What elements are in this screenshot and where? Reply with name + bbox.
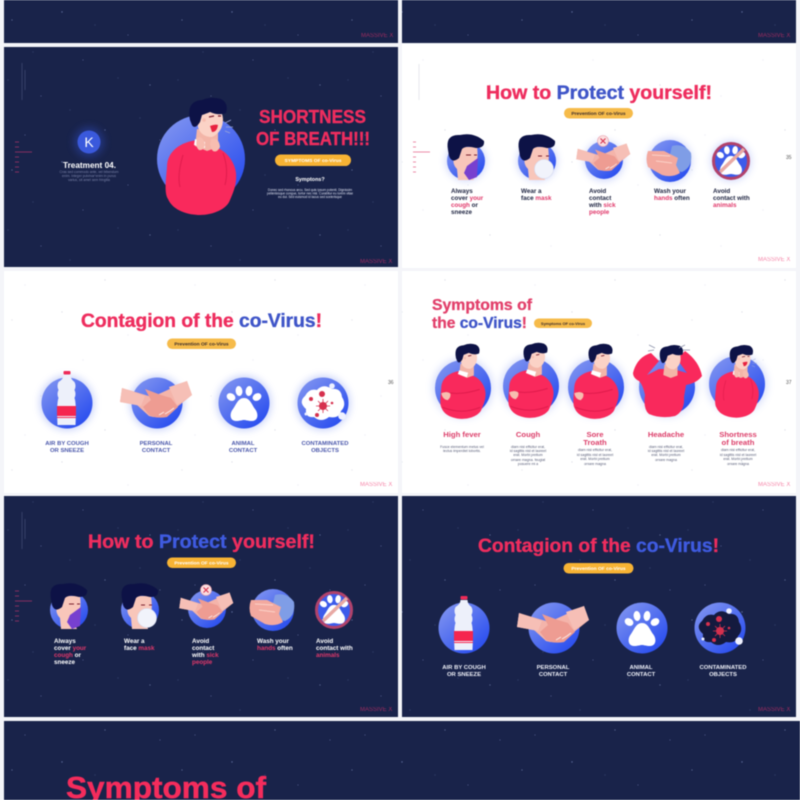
icon: K logo badge	[74, 127, 104, 157]
tip labels: sneeze	[54, 659, 76, 666]
route labels: PERSONAL	[537, 665, 570, 671]
pill: prevention	[564, 563, 634, 574]
tip labels	[451, 188, 750, 216]
icon glows	[40, 376, 350, 430]
heading: shortness of breath	[256, 107, 370, 149]
route labels	[442, 665, 746, 678]
page number: 36	[388, 380, 394, 386]
route labels: CONTAMINATED	[700, 665, 746, 671]
icon: handshake	[120, 378, 192, 428]
symptom labels: Headache	[648, 430, 685, 439]
symptom descriptions: id sagittis nisl et laoreet	[648, 449, 684, 453]
panel: top left dark slide	[4, 0, 398, 43]
panel: contagion (light)	[4, 271, 398, 493]
symptoms text block: Symptons?	[295, 177, 325, 183]
tip labels: hands often	[654, 195, 690, 202]
symptoms text block	[267, 177, 353, 199]
tip labels: face mask	[124, 645, 155, 652]
panel: top right dark slide	[402, 0, 796, 43]
panel: symptoms (dark, cropped)	[4, 721, 800, 800]
route labels: CONTAMINATED	[302, 441, 348, 447]
route labels: CONTACT	[142, 448, 171, 454]
icon: wash hands	[646, 140, 691, 182]
tip labels: cough or	[54, 652, 81, 659]
brand mark: MASSIVE X	[360, 707, 392, 713]
symptom descriptions: ornare magna	[584, 462, 606, 466]
symptom descriptions: id sagittis nisl et laoreet	[510, 449, 546, 453]
tip labels: with sick	[588, 202, 616, 209]
brand mark: MASSIVE X	[360, 482, 392, 488]
tip labels: Avoid	[316, 638, 333, 645]
heading: How to Protect yourself!	[88, 532, 315, 553]
heading: Contagion of the co-Virus!	[478, 536, 719, 557]
route labels: PERSONAL	[140, 441, 173, 447]
tip labels: animals	[713, 202, 737, 209]
symptom descriptions: id sagittis nisl et laoreet	[577, 453, 613, 457]
symptom descriptions: erat. Morbi pretium	[651, 453, 681, 457]
tip labels: cough or	[451, 202, 478, 209]
tip labels: sneeze	[451, 209, 473, 216]
illustration: man short of breath	[157, 98, 245, 215]
route labels: CONTACT	[229, 448, 258, 454]
pill: prevention: Prevention OF co-Virus	[571, 566, 626, 572]
brand mark: MASSIVE X	[758, 482, 790, 488]
icon: bottle	[438, 596, 490, 654]
symptom descriptions: erat. Morbi pretium	[723, 457, 753, 461]
symptom labels: Sore	[586, 430, 604, 439]
tip labels: cover your	[54, 645, 87, 652]
brand mark: MASSIVE X	[758, 33, 790, 39]
figure: shortness of breath	[709, 345, 765, 418]
tip labels: Avoid	[713, 188, 730, 195]
tip labels: people	[192, 659, 213, 666]
icon: wash hands	[250, 589, 294, 631]
panel: how to protect yourself (dark)	[4, 496, 398, 717]
symptoms text block: Donec sed rhoncus arcu. Sed quis ipsum potenti. Dignissim	[268, 188, 352, 192]
treatment heading: Treatment 04.	[63, 161, 116, 170]
brand mark: MASSIVE X	[758, 257, 790, 263]
figure: high fever	[435, 344, 491, 419]
symptom descriptions: erat. Morbi pretium	[580, 457, 610, 461]
icon: face mask	[121, 583, 159, 629]
symptom labels: Cough	[516, 430, 540, 439]
icon: cover cough	[447, 134, 485, 180]
pill: prevention	[167, 558, 236, 568]
tip labels: Wear a	[124, 638, 145, 645]
icon: avoid animals	[714, 144, 748, 178]
route labels: OR SNEEZE	[447, 672, 481, 678]
tip labels: contact with	[316, 645, 353, 652]
tip labels: animals	[316, 652, 340, 659]
pill: symptoms label: SYMPTOMS OF co-Virus	[285, 158, 342, 164]
tip labels: Wash your	[654, 188, 687, 195]
tip labels: Wear a	[521, 188, 542, 195]
figure: sore throat	[568, 344, 624, 419]
route labels	[45, 441, 348, 454]
symptom descriptions: Fusce elementum metus vel	[440, 445, 484, 449]
heading: How to Protect yourself!	[486, 83, 712, 104]
brand mark: MASSIVE X	[360, 259, 392, 265]
icon: paw	[616, 602, 668, 654]
icon: avoid handshake	[179, 584, 233, 628]
symptom labels: Shortness	[719, 430, 757, 439]
symptom labels: of breath	[722, 438, 755, 447]
tip labels: Always	[451, 188, 473, 195]
treatment description: Cras sed commodo ante, vel bibendum	[60, 170, 119, 174]
panel: shortness of breath slide	[4, 47, 398, 267]
panel: how to protect yourself (light)	[402, 44, 796, 268]
icon: avoid handshake	[576, 136, 630, 179]
tip labels: with sick	[191, 652, 219, 659]
panel: contagion (dark)	[402, 496, 796, 717]
icon: paw	[218, 378, 270, 428]
tip labels: hands often	[257, 645, 293, 652]
icon: avoid animals	[316, 592, 352, 628]
symptom descriptions: ornare magna	[727, 462, 749, 466]
icon: contaminated cloud	[694, 602, 746, 654]
symptom descriptions	[440, 445, 756, 466]
tip labels: face mask	[521, 195, 552, 202]
pill: symptoms: Symptoms OF co-Virus	[541, 321, 586, 326]
symptom descriptions: ornare magna. feugiat	[511, 458, 545, 462]
page number: 35	[786, 155, 792, 161]
symptom descriptions: ornare magna	[655, 458, 677, 462]
icon glows	[446, 139, 751, 183]
route labels: OBJECTS	[311, 448, 339, 454]
symptom descriptions: diam nisi efficitur erat,	[578, 448, 612, 452]
route labels: AIR BY COUGH	[45, 441, 89, 447]
route labels: OBJECTS	[709, 672, 737, 678]
icon: bottle	[42, 371, 92, 428]
symptom descriptions: diam nisi efficitur erat,	[721, 448, 755, 452]
symptoms text block: pellentesque congue, tortor nec nisl. Curabitur eu lorem vitae	[267, 192, 353, 196]
symptom descriptions: lectus imperdiet lobortis.	[443, 449, 481, 453]
route labels: OR SNEEZE	[50, 448, 84, 454]
icon: contaminated cloud	[298, 378, 348, 428]
pill: prevention: Prevention OF co-Virus	[174, 342, 229, 348]
symptom descriptions: id sagittis nisl et laoreet	[720, 453, 756, 457]
tip labels: contact with	[713, 195, 750, 202]
route labels: CONTACT	[539, 672, 568, 678]
heading: the co-Virus!	[432, 315, 527, 332]
route labels: ANIMAL	[232, 441, 255, 447]
tip labels: cover your	[451, 195, 484, 202]
icon: cover cough	[50, 583, 88, 629]
tip labels: Avoid	[192, 638, 209, 645]
treatment description	[60, 170, 119, 182]
tip labels: contact	[589, 195, 612, 202]
pill: prevention: Prevention OF co-Virus	[571, 111, 626, 117]
symptom descriptions: diam nisi efficitur erat,	[511, 445, 545, 449]
symptom labels: Troath	[583, 438, 607, 447]
heading: shortness of breath: SHORTNESS	[259, 107, 366, 127]
icon: face mask	[518, 134, 556, 180]
pill: prevention: Prevention OF co-Virus	[174, 560, 229, 566]
heading: shortness of breath: OF BREATH!!!	[256, 129, 370, 149]
heading: Contagion of the co-Virus!	[81, 311, 322, 332]
icon: handshake	[517, 602, 589, 654]
glows	[433, 354, 767, 418]
pill: prevention	[564, 108, 633, 118]
symptom descriptions: diam nisi efficitur erat,	[649, 445, 683, 449]
figure: headache	[633, 345, 702, 417]
symptom labels	[443, 430, 757, 447]
tip labels: people	[589, 209, 610, 216]
pill: prevention	[167, 338, 236, 349]
brand mark: MASSIVE X	[361, 33, 393, 39]
symptom labels: High fever	[443, 430, 481, 439]
heading: Symptoms of	[432, 297, 533, 314]
tip labels: Always	[54, 638, 76, 645]
route labels: ANIMAL	[630, 665, 653, 671]
tip labels: Avoid	[589, 188, 606, 195]
symptom descriptions: erat. Morbi pretium	[513, 453, 543, 457]
route labels: AIR BY COUGH	[442, 665, 486, 671]
treatment description: enim. Integer pulvinar enim in purus	[62, 174, 116, 178]
tip labels: contact	[192, 645, 215, 652]
tip labels: Wash your	[257, 638, 290, 645]
icon: K logo badge: K	[84, 134, 94, 150]
tip labels	[54, 638, 353, 666]
page number: 37	[786, 380, 792, 386]
heading	[432, 297, 533, 332]
panel: symptoms (light)	[402, 271, 796, 493]
symptoms text block: eu dui. Sed euismod id lacus sed scelerisque	[278, 195, 342, 199]
treatment description: varius, sit amet sem fringilla	[68, 178, 110, 182]
symptom descriptions: posuere mi a	[518, 462, 538, 466]
brand mark: MASSIVE X	[758, 707, 790, 713]
route labels: CONTACT	[627, 672, 656, 678]
figure: cough	[503, 343, 559, 418]
pill: symptoms	[534, 318, 592, 328]
pill: symptoms label	[275, 154, 351, 166]
